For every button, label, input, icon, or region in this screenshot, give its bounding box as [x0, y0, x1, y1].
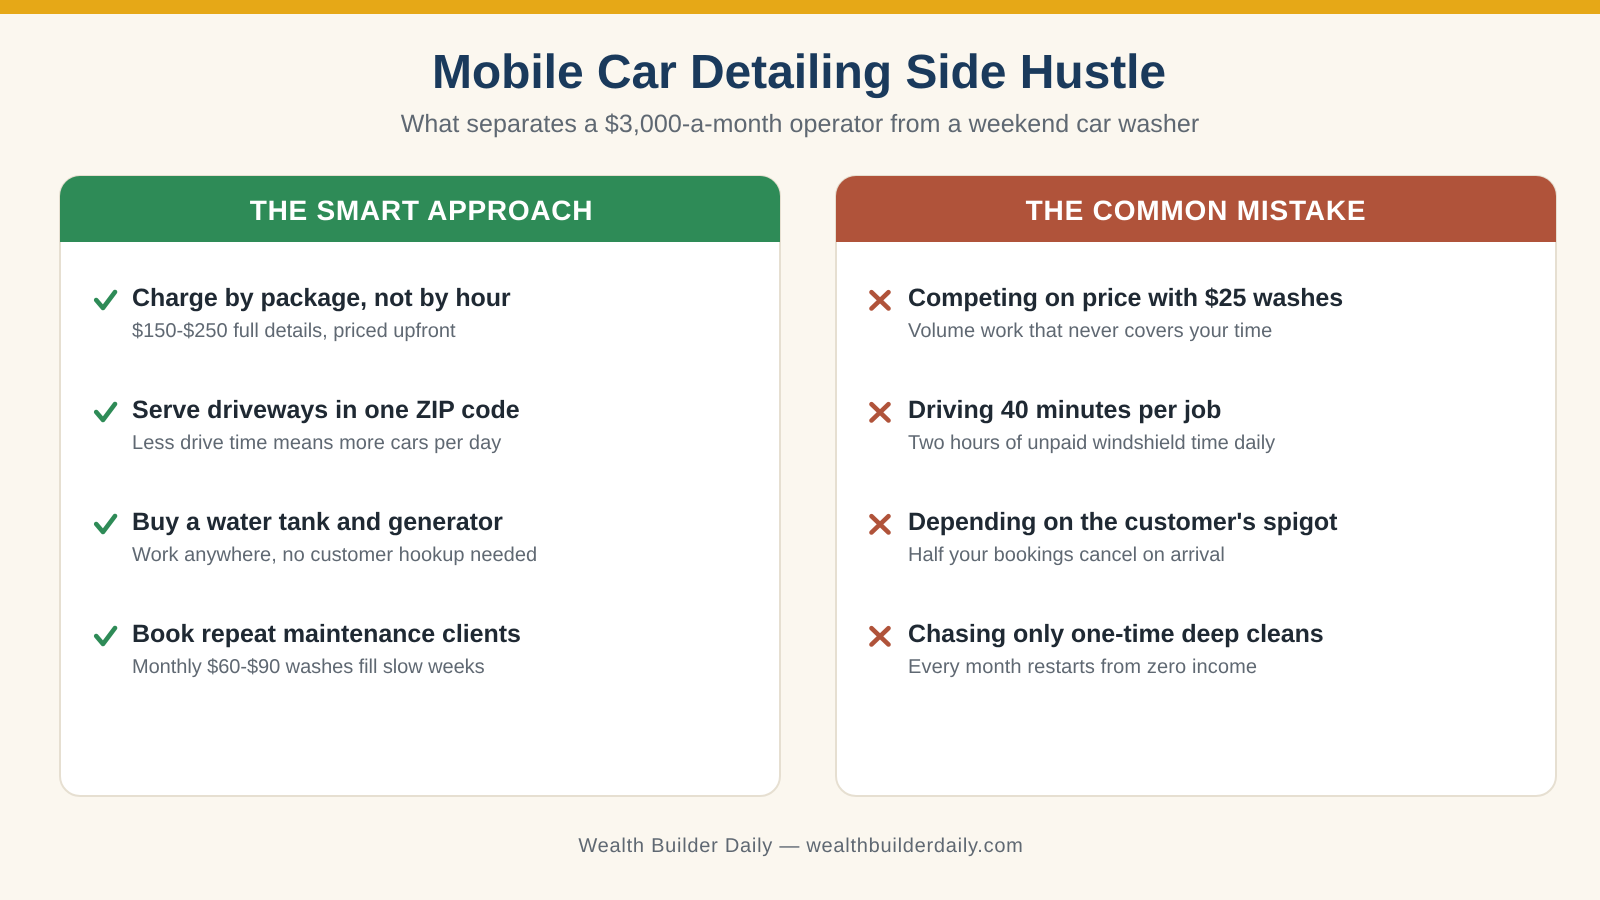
item: serve driveways: Less drive time means more cars per day	[132, 432, 501, 454]
footer: Wealth Builder Daily — wealthbuilderdaily.com	[578, 835, 1024, 857]
item: competing on price: Competing on price with $25 washes	[908, 284, 1343, 312]
item: competing on price	[908, 284, 1343, 342]
item: driving 40 minutes	[908, 396, 1275, 454]
subtitle: What separates a $3,000-a-month operator from a weekend car washer	[401, 110, 1199, 138]
item: one-time deep cleans	[908, 620, 1324, 678]
item: charge by package: Charge by package, not by hour	[132, 284, 511, 312]
title: Mobile Car Detailing Side Hustle	[432, 46, 1166, 99]
item: repeat clients	[132, 620, 521, 678]
item: driving 40 minutes: Driving 40 minutes per job	[908, 396, 1221, 424]
icon: cross 2	[869, 402, 891, 423]
item: one-time deep cleans: Every month restarts from zero income	[908, 656, 1257, 678]
item: water tank: Buy a water tank and generator	[132, 508, 503, 536]
item: competing on price: Volume work that never covers your time	[908, 320, 1272, 342]
item: customer's spigot: Half your bookings cancel on arrival	[908, 544, 1225, 566]
heading: the common mistake	[836, 176, 1556, 242]
icon: check 2	[94, 402, 118, 422]
icon: check 4	[94, 626, 118, 646]
panel: common mistake	[835, 175, 1557, 797]
icon: cross 1	[869, 290, 891, 311]
item: charge by package	[132, 284, 511, 342]
icon: check 3	[94, 514, 118, 534]
item: customer's spigot	[908, 508, 1338, 566]
icon: cross 3	[869, 514, 891, 535]
item: customer's spigot: Depending on the customer's spigot	[908, 508, 1337, 536]
item: driving 40 minutes: Two hours of unpaid windshield time daily	[908, 432, 1275, 454]
item: one-time deep cleans: Chasing only one-time deep cleans	[908, 620, 1324, 648]
item: charge by package: $150-$250 full details, priced upfront	[132, 320, 456, 342]
item: water tank: Work anywhere, no customer hookup needed	[132, 544, 537, 566]
item: serve driveways: Serve driveways in one ZIP code	[132, 396, 520, 424]
panel: smart approach	[59, 175, 781, 797]
item: serve driveways	[132, 396, 520, 454]
heading: the smart approach	[60, 176, 780, 242]
icon: cross 4	[869, 626, 891, 647]
top accent bar	[0, 0, 1600, 14]
item: water tank	[132, 508, 537, 566]
heading: the common mistake: THE COMMON MISTAKE	[1026, 195, 1366, 226]
heading: the smart approach: THE SMART APPROACH	[250, 195, 593, 226]
item: repeat clients: Book repeat maintenance clients	[132, 620, 521, 648]
item: repeat clients: Monthly $60-$90 washes fill slow weeks	[132, 656, 485, 678]
icon: check 1	[94, 290, 118, 310]
